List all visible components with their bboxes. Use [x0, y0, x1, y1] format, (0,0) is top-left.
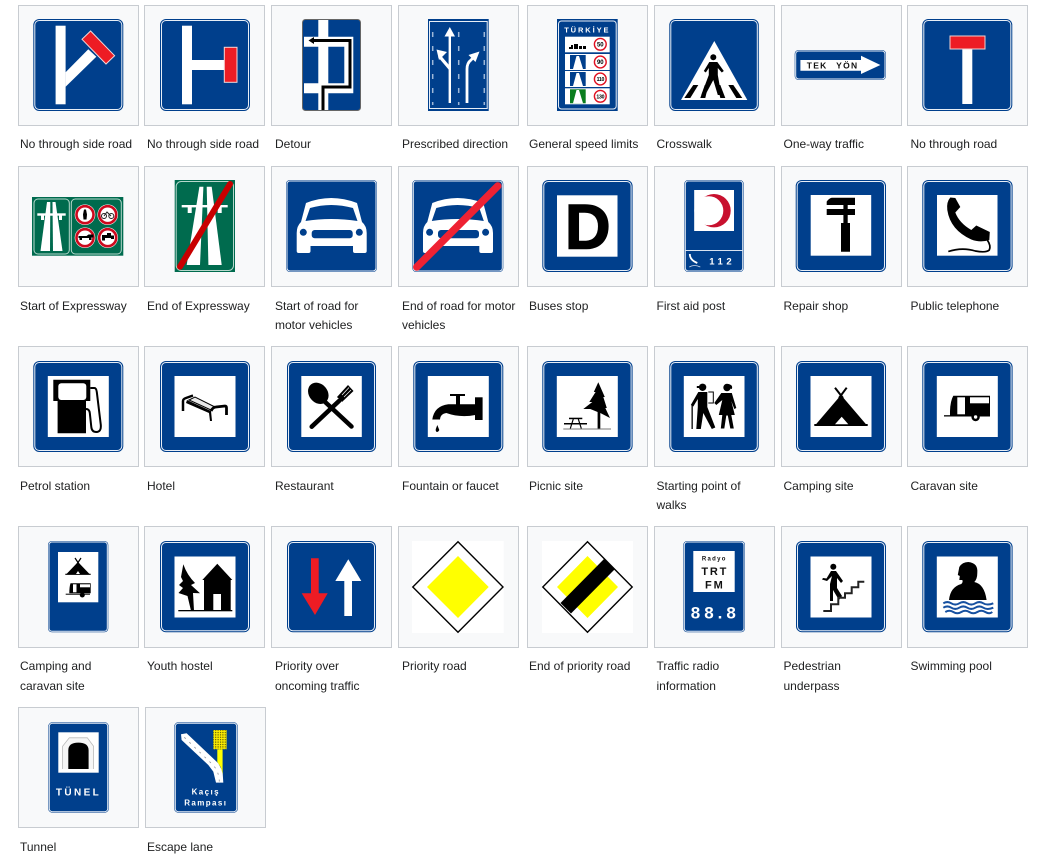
panel: Escape lane [146, 708, 266, 854]
label: Start of Expressway [20, 299, 127, 313]
label: Starting point of [656, 479, 741, 493]
label: Prescribed direction [402, 137, 508, 151]
icon: Türkiye speed limits sign [557, 19, 618, 111]
icon: tunnel sign [48, 722, 109, 813]
icon: pedestrian underpass sign [796, 541, 886, 632]
radio station text [701, 557, 728, 591]
radio station text: Radyo [702, 557, 727, 563]
label: Crosswalk [656, 137, 713, 151]
icon: telephone sign [922, 180, 1013, 272]
icon: crosswalk sign [669, 19, 759, 111]
icon: first aid post sign [684, 180, 744, 272]
icon: prescribed lane direction sign [428, 19, 489, 111]
panel: Start of road for motor vehicles [272, 166, 392, 332]
label: End of road for motor [402, 299, 515, 313]
label: End of Expressway [147, 299, 250, 313]
icon: petrol pump sign [33, 361, 123, 452]
panel: Priority over oncoming traffic [272, 526, 392, 693]
icon: swimming pool sign [922, 541, 1013, 632]
panel: End of Expressway [144, 166, 264, 313]
panel: Pedestrian underpass [782, 526, 902, 693]
panel: Buses stop [528, 166, 648, 313]
radio frequency: 88.8 [691, 603, 740, 622]
icon: perpendicular dead-end side road sign [160, 19, 250, 111]
icon: repair shop sign [796, 180, 886, 272]
icon: camping and caravan sign [48, 541, 108, 632]
panel: End of road for motor vehicles [398, 166, 518, 332]
panel: Picnic site [528, 346, 648, 493]
label: information [656, 679, 716, 693]
phone number: 112 [709, 256, 735, 268]
panel: No through side road (perpendicular) [144, 6, 264, 151]
label: One-way traffic [784, 137, 864, 151]
label: walks [656, 498, 687, 512]
label: Buses stop [529, 299, 589, 313]
sign text: TÜNEL [56, 786, 101, 799]
panel: Public telephone [908, 166, 1028, 313]
icon: caravan sign [922, 361, 1013, 452]
panel: Caravan site [908, 346, 1028, 493]
panel: Restaurant [272, 346, 392, 493]
label: Start of road for [275, 299, 358, 313]
panel: General speed limits [528, 6, 648, 151]
sign heading: TÜRKİYE [564, 26, 610, 34]
label: General speed limits [529, 137, 638, 151]
label: No through side road [147, 137, 259, 151]
icon: Türkiye speed limits sign: 110 [597, 77, 604, 83]
panel: No through side road (diagonal) [18, 6, 138, 151]
radio station text: TRT [701, 566, 728, 578]
label: Tunnel [20, 840, 56, 854]
icon: diagonal dead-end side road sign [33, 19, 123, 111]
icon: one-way arrow sign [795, 50, 886, 80]
panel: One-way traffic [782, 6, 902, 151]
panel: Prescribed direction [398, 6, 518, 151]
icon: priority over oncoming traffic sign [287, 541, 376, 632]
label: Youth hostel [147, 659, 213, 673]
label: Fountain or faucet [402, 479, 499, 493]
icon: traffic radio sign [683, 541, 745, 632]
panel: Crosswalk [654, 6, 774, 151]
icon: spoon and fork sign [287, 361, 376, 452]
label: vehicles [402, 318, 445, 332]
sign text: Kaçış [192, 787, 220, 796]
label: Petrol station [20, 479, 90, 493]
label: Repair shop [784, 299, 849, 313]
panel: Petrol station [18, 346, 138, 493]
label: End of priority road [529, 659, 630, 673]
icon: Türkiye speed limits sign: 50 [597, 42, 604, 48]
icon: tent sign [796, 361, 886, 452]
icon: youth hostel sign [160, 541, 250, 632]
panel: Camping and caravan site [18, 526, 138, 693]
icon: escape lane sign [174, 722, 238, 813]
panel: Starting point of walks [654, 346, 774, 512]
label: Priority road [402, 659, 467, 673]
icon: Türkiye speed limits sign: 130 [596, 94, 605, 100]
label: Hotel [147, 479, 175, 493]
icon: dead-end T sign [922, 19, 1012, 111]
label: Traffic radio [656, 659, 720, 673]
panel: Swimming pool [908, 526, 1028, 673]
panel: First aid post [654, 166, 774, 313]
label: Public telephone [910, 299, 1000, 313]
icon: end of priority road diamond [542, 541, 633, 633]
icon: faucet sign [413, 361, 503, 452]
icon: picnic site sign [542, 361, 633, 452]
label: Camping and [20, 659, 91, 673]
label: motor vehicles [275, 318, 352, 332]
icon: bed sign [160, 361, 250, 452]
label: No through road [910, 137, 997, 151]
label: oncoming traffic [275, 679, 360, 693]
panel: Repair shop [782, 166, 902, 313]
letter D: D [565, 192, 611, 262]
icon: bus stop D sign [542, 180, 633, 272]
icon: hikers sign [669, 361, 759, 452]
panel: Detour [272, 6, 392, 151]
panel: Fountain or faucet [398, 346, 518, 493]
icon: expressway end sign [175, 180, 235, 272]
label: Escape lane [147, 840, 213, 854]
label: underpass [784, 679, 840, 693]
sign text [184, 787, 227, 807]
icon: Türkiye speed limits sign: 90 [597, 60, 604, 66]
label: caravan site [20, 679, 85, 693]
icon: priority road diamond [412, 541, 504, 633]
label: Restaurant [275, 479, 334, 493]
label: Priority over [275, 659, 339, 673]
label: Pedestrian [784, 659, 841, 673]
panel: Youth hostel [144, 526, 264, 673]
label: Detour [275, 137, 311, 151]
label: Picnic site [529, 479, 583, 493]
radio station text: FM [705, 579, 725, 591]
icon: expressway start sign with prohibitions [32, 197, 123, 256]
panel: Hotel [144, 346, 264, 493]
panel: Priority road [398, 526, 518, 673]
panel: Camping site [782, 346, 902, 493]
label: First aid post [656, 299, 726, 313]
panel: Start of Expressway [18, 166, 138, 313]
sign text: Rampası [184, 798, 227, 807]
panel: Traffic radio information [654, 526, 774, 693]
sign text: TEK YÖN [807, 60, 858, 70]
label: Caravan site [910, 479, 978, 493]
icon: end of car road sign [412, 180, 503, 272]
label: No through side road [20, 137, 132, 151]
icon: detour sign [302, 20, 360, 110]
panel: No through road [908, 6, 1028, 151]
label: Camping site [784, 479, 854, 493]
panel: Tunnel [18, 708, 138, 854]
icon: car sign [286, 180, 377, 272]
panel: End of priority road [528, 526, 648, 673]
label: Swimming pool [910, 659, 992, 673]
